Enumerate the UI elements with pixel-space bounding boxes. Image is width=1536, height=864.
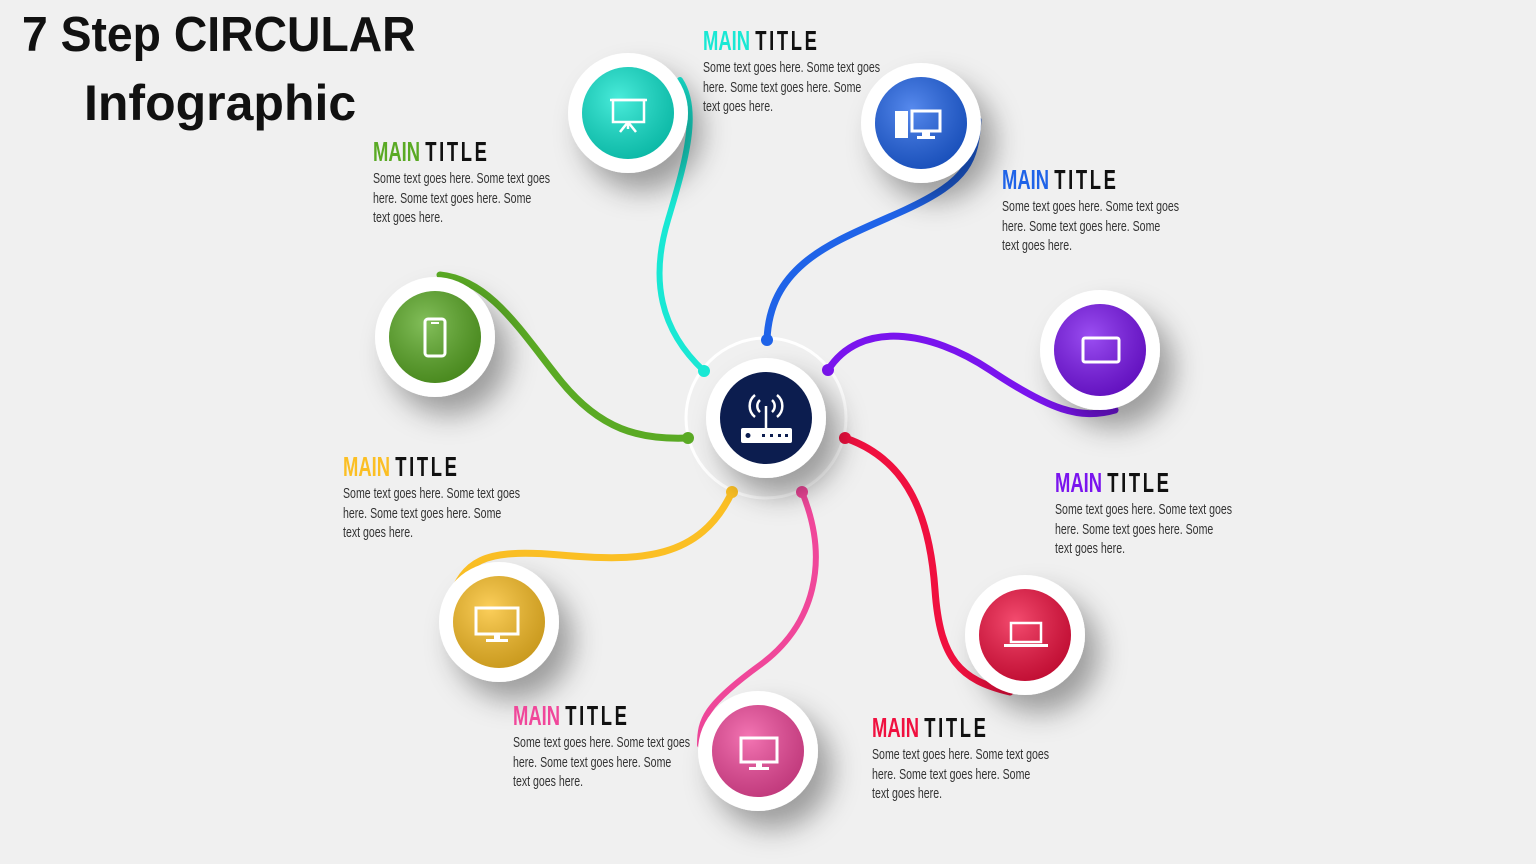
text: green: Some text goes here. Some text goes bbox=[373, 171, 550, 187]
text: red: MAINTITLE bbox=[872, 712, 988, 743]
text: purple: MAINTITLE bbox=[1055, 467, 1171, 498]
text: yellow: here. Some text goes here. Some bbox=[343, 506, 501, 522]
icon: phone (green) bbox=[375, 277, 495, 397]
text: purple: here. Some text goes here. Some bbox=[1055, 522, 1213, 538]
center hub: router icon bbox=[706, 358, 826, 478]
text: blue: MAINTITLE bbox=[1002, 164, 1118, 195]
icon: desktop (blue) bbox=[861, 63, 981, 183]
text: green: MAINTITLE bbox=[373, 136, 489, 167]
text: green: text goes here. bbox=[373, 210, 443, 226]
title bbox=[22, 8, 416, 131]
text: cyan bbox=[703, 25, 880, 115]
text: pink: text goes here. bbox=[513, 774, 583, 790]
text: cyan: text goes here. bbox=[703, 99, 773, 115]
text: pink bbox=[513, 700, 690, 790]
text: blue: text goes here. bbox=[1002, 238, 1072, 254]
text: red: text goes here. bbox=[872, 786, 942, 802]
text: pink: here. Some text goes here. Some bbox=[513, 754, 671, 770]
text: cyan: Some text goes here. Some text goes bbox=[703, 60, 880, 76]
text: yellow: Some text goes here. Some text goes bbox=[343, 486, 520, 502]
title: 7 Step CIRCULAR bbox=[22, 8, 416, 62]
icon: laptop (red) bbox=[965, 575, 1085, 695]
text: red: here. Some text goes here. Some bbox=[872, 766, 1030, 782]
text: yellow bbox=[343, 451, 520, 541]
text: pink: MAINTITLE bbox=[513, 700, 629, 731]
icon: tv (yellow) bbox=[439, 562, 559, 682]
ring bbox=[686, 338, 846, 498]
text: purple: text goes here. bbox=[1055, 541, 1125, 557]
text: green bbox=[373, 136, 550, 226]
text: green: here. Some text goes here. Some bbox=[373, 190, 531, 206]
text: blue: Some text goes here. Some text goes bbox=[1002, 199, 1179, 215]
icon: monitor (pink) bbox=[698, 691, 818, 811]
text: yellow: MAINTITLE bbox=[343, 451, 459, 482]
icon: tablet (purple) bbox=[1040, 290, 1160, 410]
text: blue: here. Some text goes here. Some bbox=[1002, 218, 1160, 234]
dots bbox=[682, 334, 851, 498]
ribbons bbox=[440, 80, 1115, 745]
text: purple bbox=[1055, 467, 1232, 557]
text: purple: Some text goes here. Some text goes bbox=[1055, 502, 1232, 518]
text: red bbox=[872, 712, 1049, 802]
text: cyan: MAINTITLE bbox=[703, 25, 819, 56]
text: red: Some text goes here. Some text goes bbox=[872, 747, 1049, 763]
text: cyan: here. Some text goes here. Some bbox=[703, 80, 861, 96]
text: yellow: text goes here. bbox=[343, 525, 413, 541]
text: pink: Some text goes here. Some text goes bbox=[513, 735, 690, 751]
title: Infographic bbox=[84, 75, 356, 131]
text: blue bbox=[1002, 164, 1179, 254]
icon: presentation (cyan) bbox=[568, 53, 688, 173]
